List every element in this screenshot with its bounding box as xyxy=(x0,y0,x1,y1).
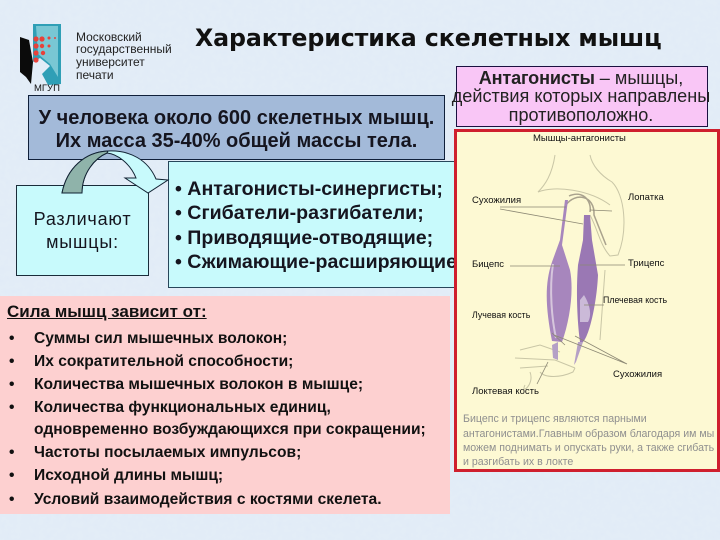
arrow: curved from distinguish box to list xyxy=(61,150,170,194)
factor list: одновременно возбуждающихся при сокращении; xyxy=(34,421,426,438)
panel: distinguish muscles xyxy=(16,185,149,276)
panel: muscle count: У человека около 600 скелетных мышц. xyxy=(39,107,434,129)
title: Характеристика скелетных мышц xyxy=(195,24,662,52)
diagram: arm muscles xyxy=(463,133,715,468)
factor list: Количества функциональных единиц, xyxy=(34,399,331,416)
panel: distinguish muscles: Различают xyxy=(34,209,131,229)
diagram: arm muscles: Лучевая кость xyxy=(472,310,531,320)
panel: distinguish muscles: мышцы: xyxy=(46,232,119,252)
text: Антагонисты – мышцы, xyxy=(479,68,683,88)
diagram: arm muscles: Бицепс и трицепс являются парными xyxy=(463,413,647,425)
factor list xyxy=(9,330,426,508)
logo: MGUP university xyxy=(20,24,172,92)
diagram: arm muscles: Сухожилия xyxy=(613,369,662,380)
panel: muscle classification list: • Приводящие-отводящие; xyxy=(175,227,433,249)
diagram: arm muscles: антагонистами.Главным образом благодаря им мы xyxy=(463,428,714,440)
diagram: arm muscles: Бицепс xyxy=(472,259,504,270)
factor list: Исходной длины мышц; xyxy=(34,467,223,484)
diagram: arm muscles: Мышцы-антагонисты xyxy=(533,133,626,144)
factor list: • xyxy=(9,491,14,508)
heading: muscle strength: Сила мышц зависит от: xyxy=(7,302,207,321)
factor list: Количества мышечных волокон в мышце; xyxy=(34,376,363,393)
factor list: • xyxy=(9,399,14,416)
panel: antagonist muscle diagram xyxy=(454,129,720,472)
logo: MGUP university: Московский xyxy=(76,30,142,44)
text: противоположно. xyxy=(509,105,653,125)
logo: MGUP university: государственный xyxy=(76,42,172,56)
factor list: • xyxy=(9,353,14,370)
diagram: arm muscles: можем поднимать и опускать руки, а также сгибать xyxy=(463,442,715,454)
factor list: • xyxy=(9,444,14,461)
factor list: Условий взаимодействия с костями скелета. xyxy=(34,491,382,508)
text: действия которых направлены xyxy=(452,86,710,106)
diagram: arm muscles: Лопатка xyxy=(628,192,664,203)
factor list: • xyxy=(9,376,14,393)
panel: muscle classification list: • Сжимающие-расширяющие xyxy=(175,251,455,273)
factor list: Частоты посылаемых импульсов; xyxy=(34,444,301,461)
diagram: arm muscles: Трицепс xyxy=(628,258,665,269)
panel: muscle classification list: • Сгибатели-разгибатели; xyxy=(175,202,424,224)
factor list: • xyxy=(9,467,14,484)
diagram: arm muscles: Плечевая кость xyxy=(603,295,667,305)
panel: muscle classification list xyxy=(168,161,455,288)
diagram: arm muscles: Локтевая кость xyxy=(472,386,539,397)
panel: muscle classification list: • Антагонисты-синергисты; xyxy=(175,178,443,200)
factor list: • xyxy=(9,330,14,347)
logo: MGUP university: печати xyxy=(76,68,114,82)
callout: antagonists definition xyxy=(456,66,708,127)
factor list: Их сократительной способности; xyxy=(34,353,293,370)
diagram: arm muscles: Сухожилия xyxy=(472,195,521,206)
panel: muscle strength factors xyxy=(0,296,450,514)
factor list: Суммы сил мышечных волокон; xyxy=(34,330,287,347)
panel: muscle count: Их масса 35-40% общей массы тела. xyxy=(56,130,417,152)
logo: MGUP university: университет xyxy=(76,55,145,69)
diagram: arm muscles: и разгибать их в локте xyxy=(463,456,573,468)
panel: muscle count xyxy=(28,95,445,160)
